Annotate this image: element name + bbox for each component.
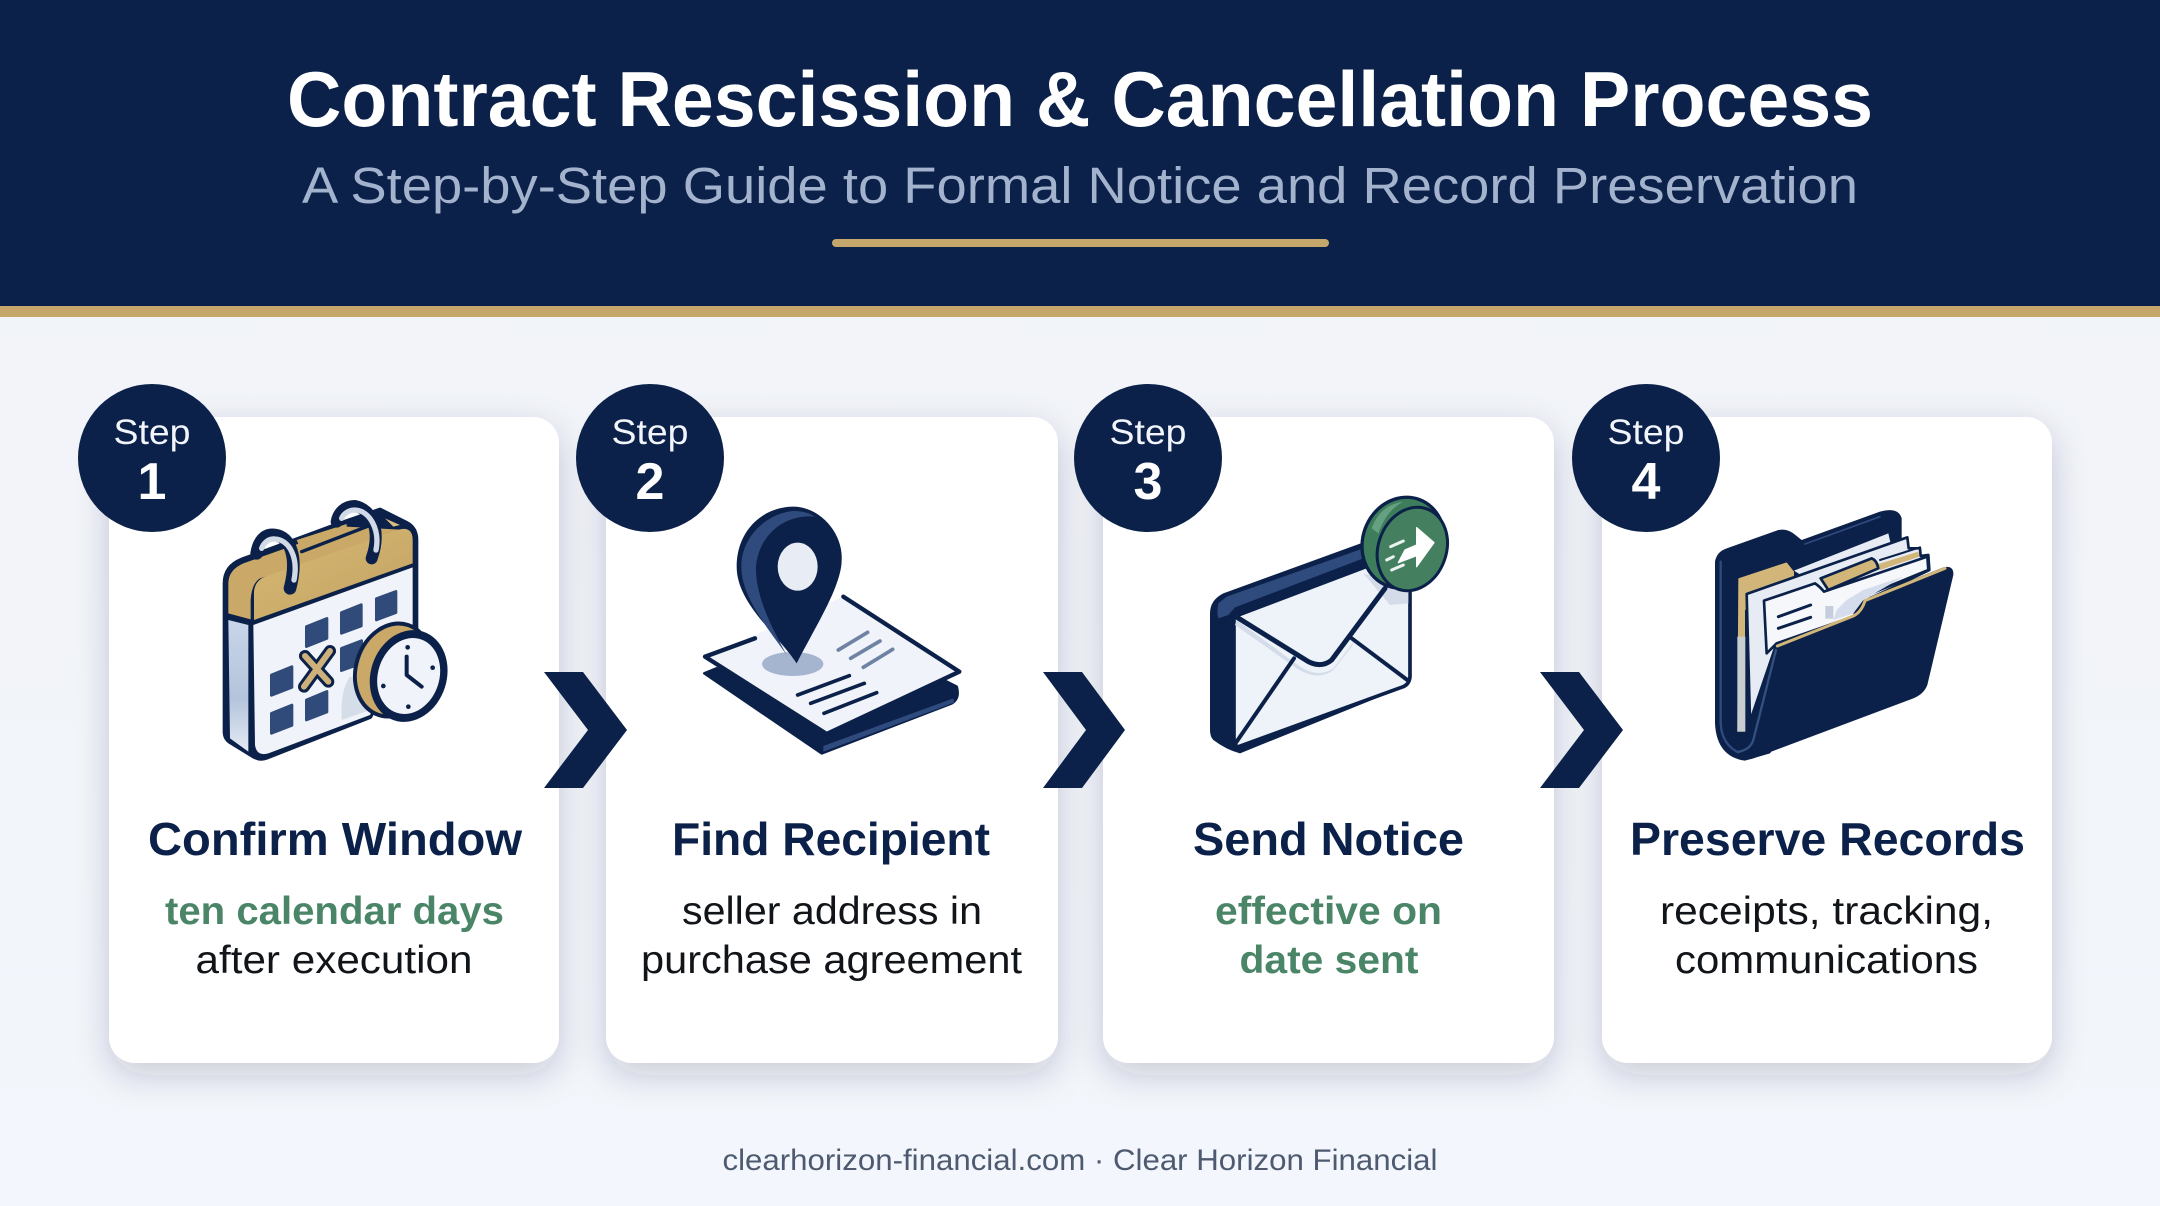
badge: step 2: Step	[612, 413, 688, 452]
highlighted detail: effective on	[1215, 890, 1442, 933]
header banner	[0, 0, 2160, 317]
footer: clearhorizon-financial.com · Clear Horizon Financial	[722, 1144, 1438, 1177]
icon: calendar with clock	[225, 506, 459, 758]
panel: step 2 find recipient	[606, 417, 1058, 1063]
badge: step 1	[78, 384, 226, 532]
arrow: step 3 to 4	[1540, 672, 1623, 788]
icon: open folder with papers	[1715, 510, 1953, 761]
badge: step 4: Step	[1608, 413, 1684, 452]
arrow: step 2 to 3	[1043, 672, 1125, 788]
gold underline	[832, 239, 1329, 247]
badge: step 3	[1074, 384, 1222, 532]
title: Contract Rescission & Cancellation Process	[287, 55, 1873, 143]
detail text: after execution	[196, 939, 472, 982]
badge: step 2: 2	[636, 453, 664, 511]
panel: step 1 confirm window	[109, 417, 559, 1063]
heading: Confirm Window	[148, 813, 522, 865]
badge: step 1: 1	[138, 453, 166, 511]
highlighted detail: ten calendar days	[165, 890, 504, 933]
highlighted detail line 2: date sent	[1240, 939, 1419, 982]
icon: location pin on document	[704, 507, 959, 753]
badge: step 3: 3	[1134, 453, 1162, 511]
heading: Preserve Records	[1630, 813, 2025, 865]
badge: step 1: Step	[114, 413, 190, 452]
panel: step 4 preserve records	[1602, 417, 2052, 1063]
heading: Find Recipient	[672, 813, 990, 865]
arrow: step 1 to 2	[544, 672, 627, 788]
panel: step 3 send notice	[1103, 417, 1554, 1063]
detail text line 2: purchase agreement	[641, 939, 1022, 982]
icon: envelope with green send badge	[1210, 486, 1459, 753]
heading: Send Notice	[1193, 813, 1464, 865]
badge: step 2	[576, 384, 724, 532]
badge: step 4: 4	[1632, 453, 1661, 511]
badge: step 4	[1572, 384, 1720, 532]
detail text line 2: communications	[1675, 939, 1978, 982]
badge: step 3: Step	[1110, 413, 1186, 452]
detail text: seller address in	[682, 890, 982, 933]
subtitle: A Step-by-Step Guide to Formal Notice and Record Preservation	[302, 157, 1858, 214]
detail text: receipts, tracking,	[1660, 890, 1993, 933]
